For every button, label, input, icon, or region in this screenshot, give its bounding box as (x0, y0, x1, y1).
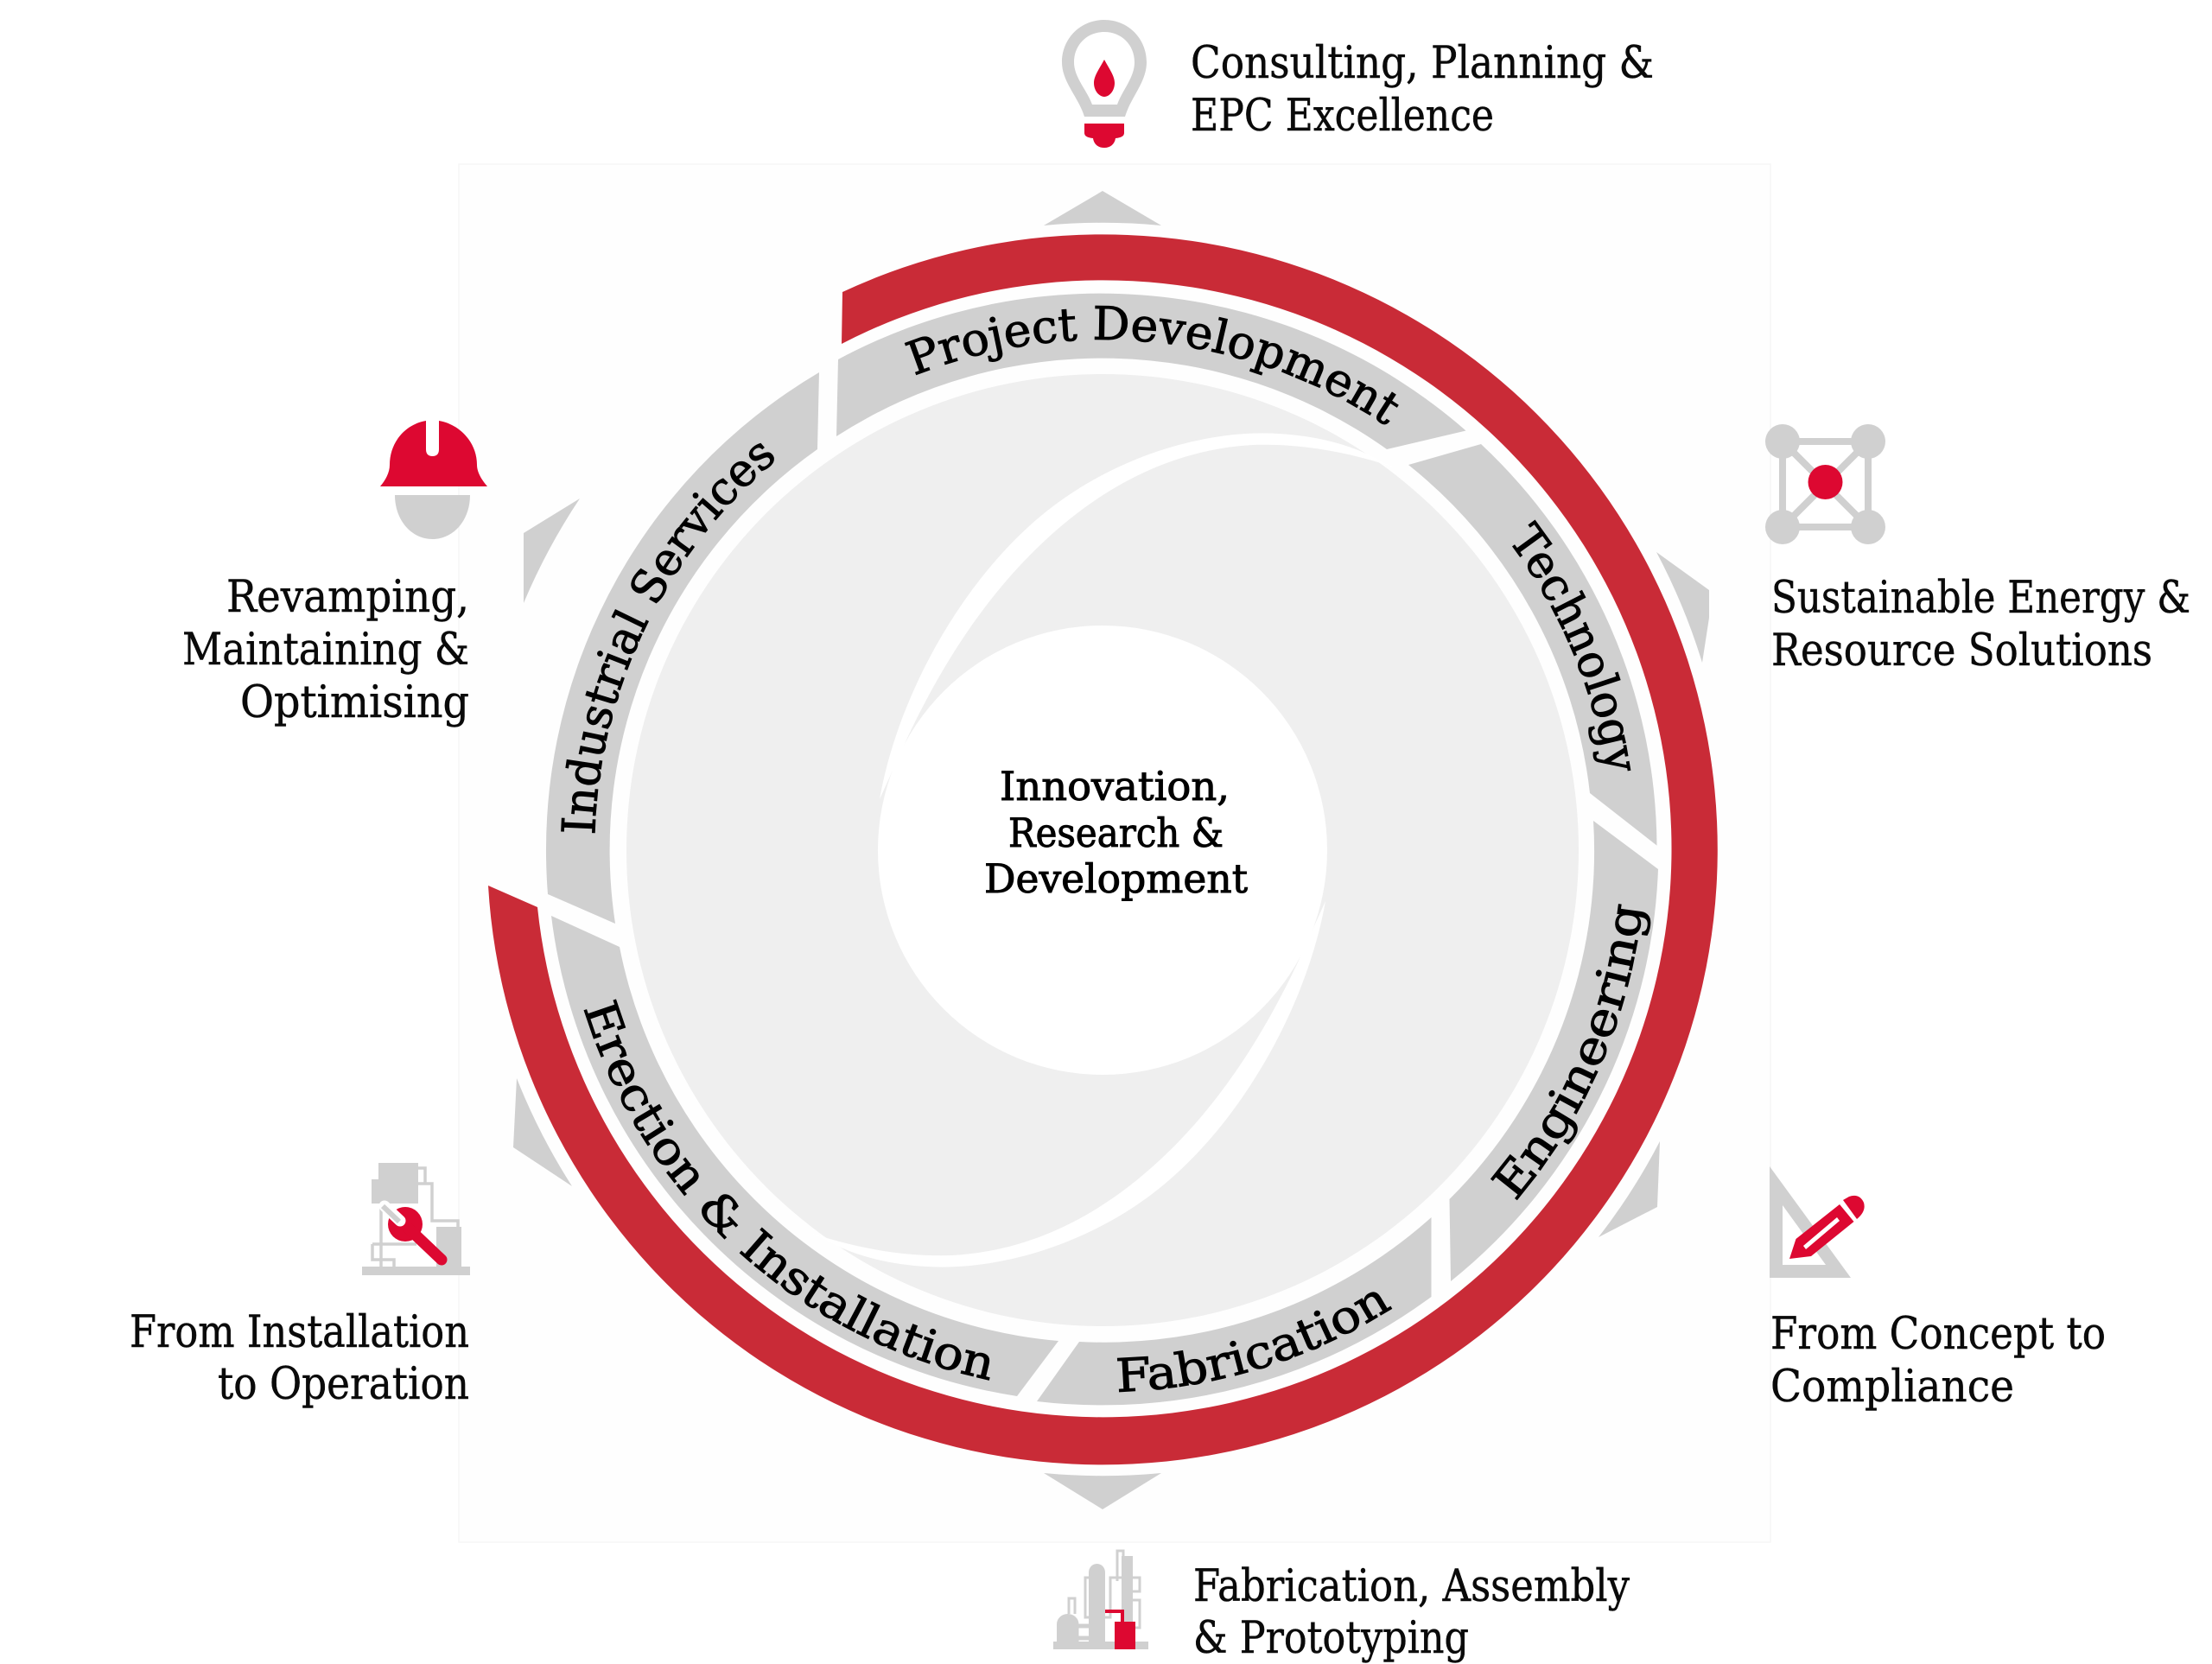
ring label: Project Development: Project Development (904, 306, 1399, 425)
segment: Engineering (1450, 821, 1658, 1281)
arrow: bottom (1044, 1473, 1161, 1509)
ring label: Fabrication: Fabrication (1116, 1292, 1393, 1393)
icon: light bulb with flame (1062, 20, 1147, 148)
text: Sustainable Energy & Resource Solutions (1771, 573, 2190, 676)
faint frame behind the cycle (459, 164, 1770, 1542)
text: Consulting, Planning & EPC Excellence: Consulting, Planning & (1191, 38, 1654, 89)
icon: wrench over machinery (362, 1163, 470, 1275)
segment: Project Development (836, 294, 1465, 449)
text: Fabrication, Assembly & Prototyping (1193, 1561, 1630, 1664)
icon: hard hat (380, 421, 487, 539)
red outer ring arc (488, 234, 1718, 1464)
ring label: Engineering: Engineering (1490, 904, 1650, 1201)
text: Revamping, Maintaining & Optimising: Maintaining & (182, 625, 469, 676)
text: Consulting, Planning & EPC Excellence: EPC Excellence (1191, 91, 1494, 142)
centre text (984, 763, 1249, 902)
arrow: direction markers around the ring (513, 191, 1709, 1509)
text: Fabrication, Assembly & Prototyping: Fabrication, Assembly (1193, 1561, 1630, 1612)
segment: Technology (1408, 444, 1657, 846)
light grey disc (626, 374, 1579, 1326)
arrow: top (1044, 191, 1161, 225)
swirl stroke: upper (880, 433, 1404, 799)
icon: set square and pencil (1770, 1166, 1865, 1278)
text: Sustainable Energy & Resource Solutions: Resource Solutions (1771, 626, 2152, 676)
icon: molecule network (1765, 424, 1885, 544)
text: From Concept to Compliance: From Concept to (1770, 1309, 2106, 1360)
centre text: Research & (1008, 810, 1224, 856)
ring label: Industrial Services: Industrial Services (561, 442, 774, 833)
centre text: Innovation, (1000, 763, 1230, 810)
text: Fabrication, Assembly & Prototyping: & Prototyping (1193, 1613, 1469, 1664)
ring label: Erection and Installation: Erection & Installation (584, 999, 990, 1381)
centre white circle (878, 626, 1327, 1075)
icon: plant with red tank (1053, 1551, 1148, 1649)
centre text: Development (984, 855, 1249, 902)
segment: Industrial Services (546, 372, 819, 924)
segment: Erection and Installation (551, 916, 1058, 1396)
text: Consulting, Planning & EPC Excellence (1191, 38, 1654, 142)
text: Revamping, Maintaining & Optimising: Revamping, (226, 572, 469, 623)
swirl stroke: lower (801, 901, 1325, 1267)
text: From Concept to Compliance (1770, 1309, 2106, 1413)
text: Revamping, Maintaining & Optimising (182, 572, 469, 728)
text: From Installation to Operation: to Operation (218, 1359, 469, 1410)
segment: Fabrication (1037, 1217, 1431, 1405)
arrow: upper right (1656, 552, 1709, 663)
ring label: Technology: Technology (1512, 520, 1631, 771)
arrow: lower left (513, 1078, 572, 1186)
arrow: upper left (524, 499, 580, 603)
text: From Installation to Operation (130, 1307, 469, 1410)
inner light disc with swirl (626, 374, 1579, 1326)
text: From Concept to Compliance: Compliance (1770, 1362, 2014, 1413)
text: From Installation to Operation: From Installation (130, 1307, 469, 1358)
grey segmented ring (546, 294, 1658, 1405)
text: Revamping, Maintaining & Optimising: Optimising (240, 677, 469, 728)
arrow: lower right (1599, 1141, 1660, 1237)
